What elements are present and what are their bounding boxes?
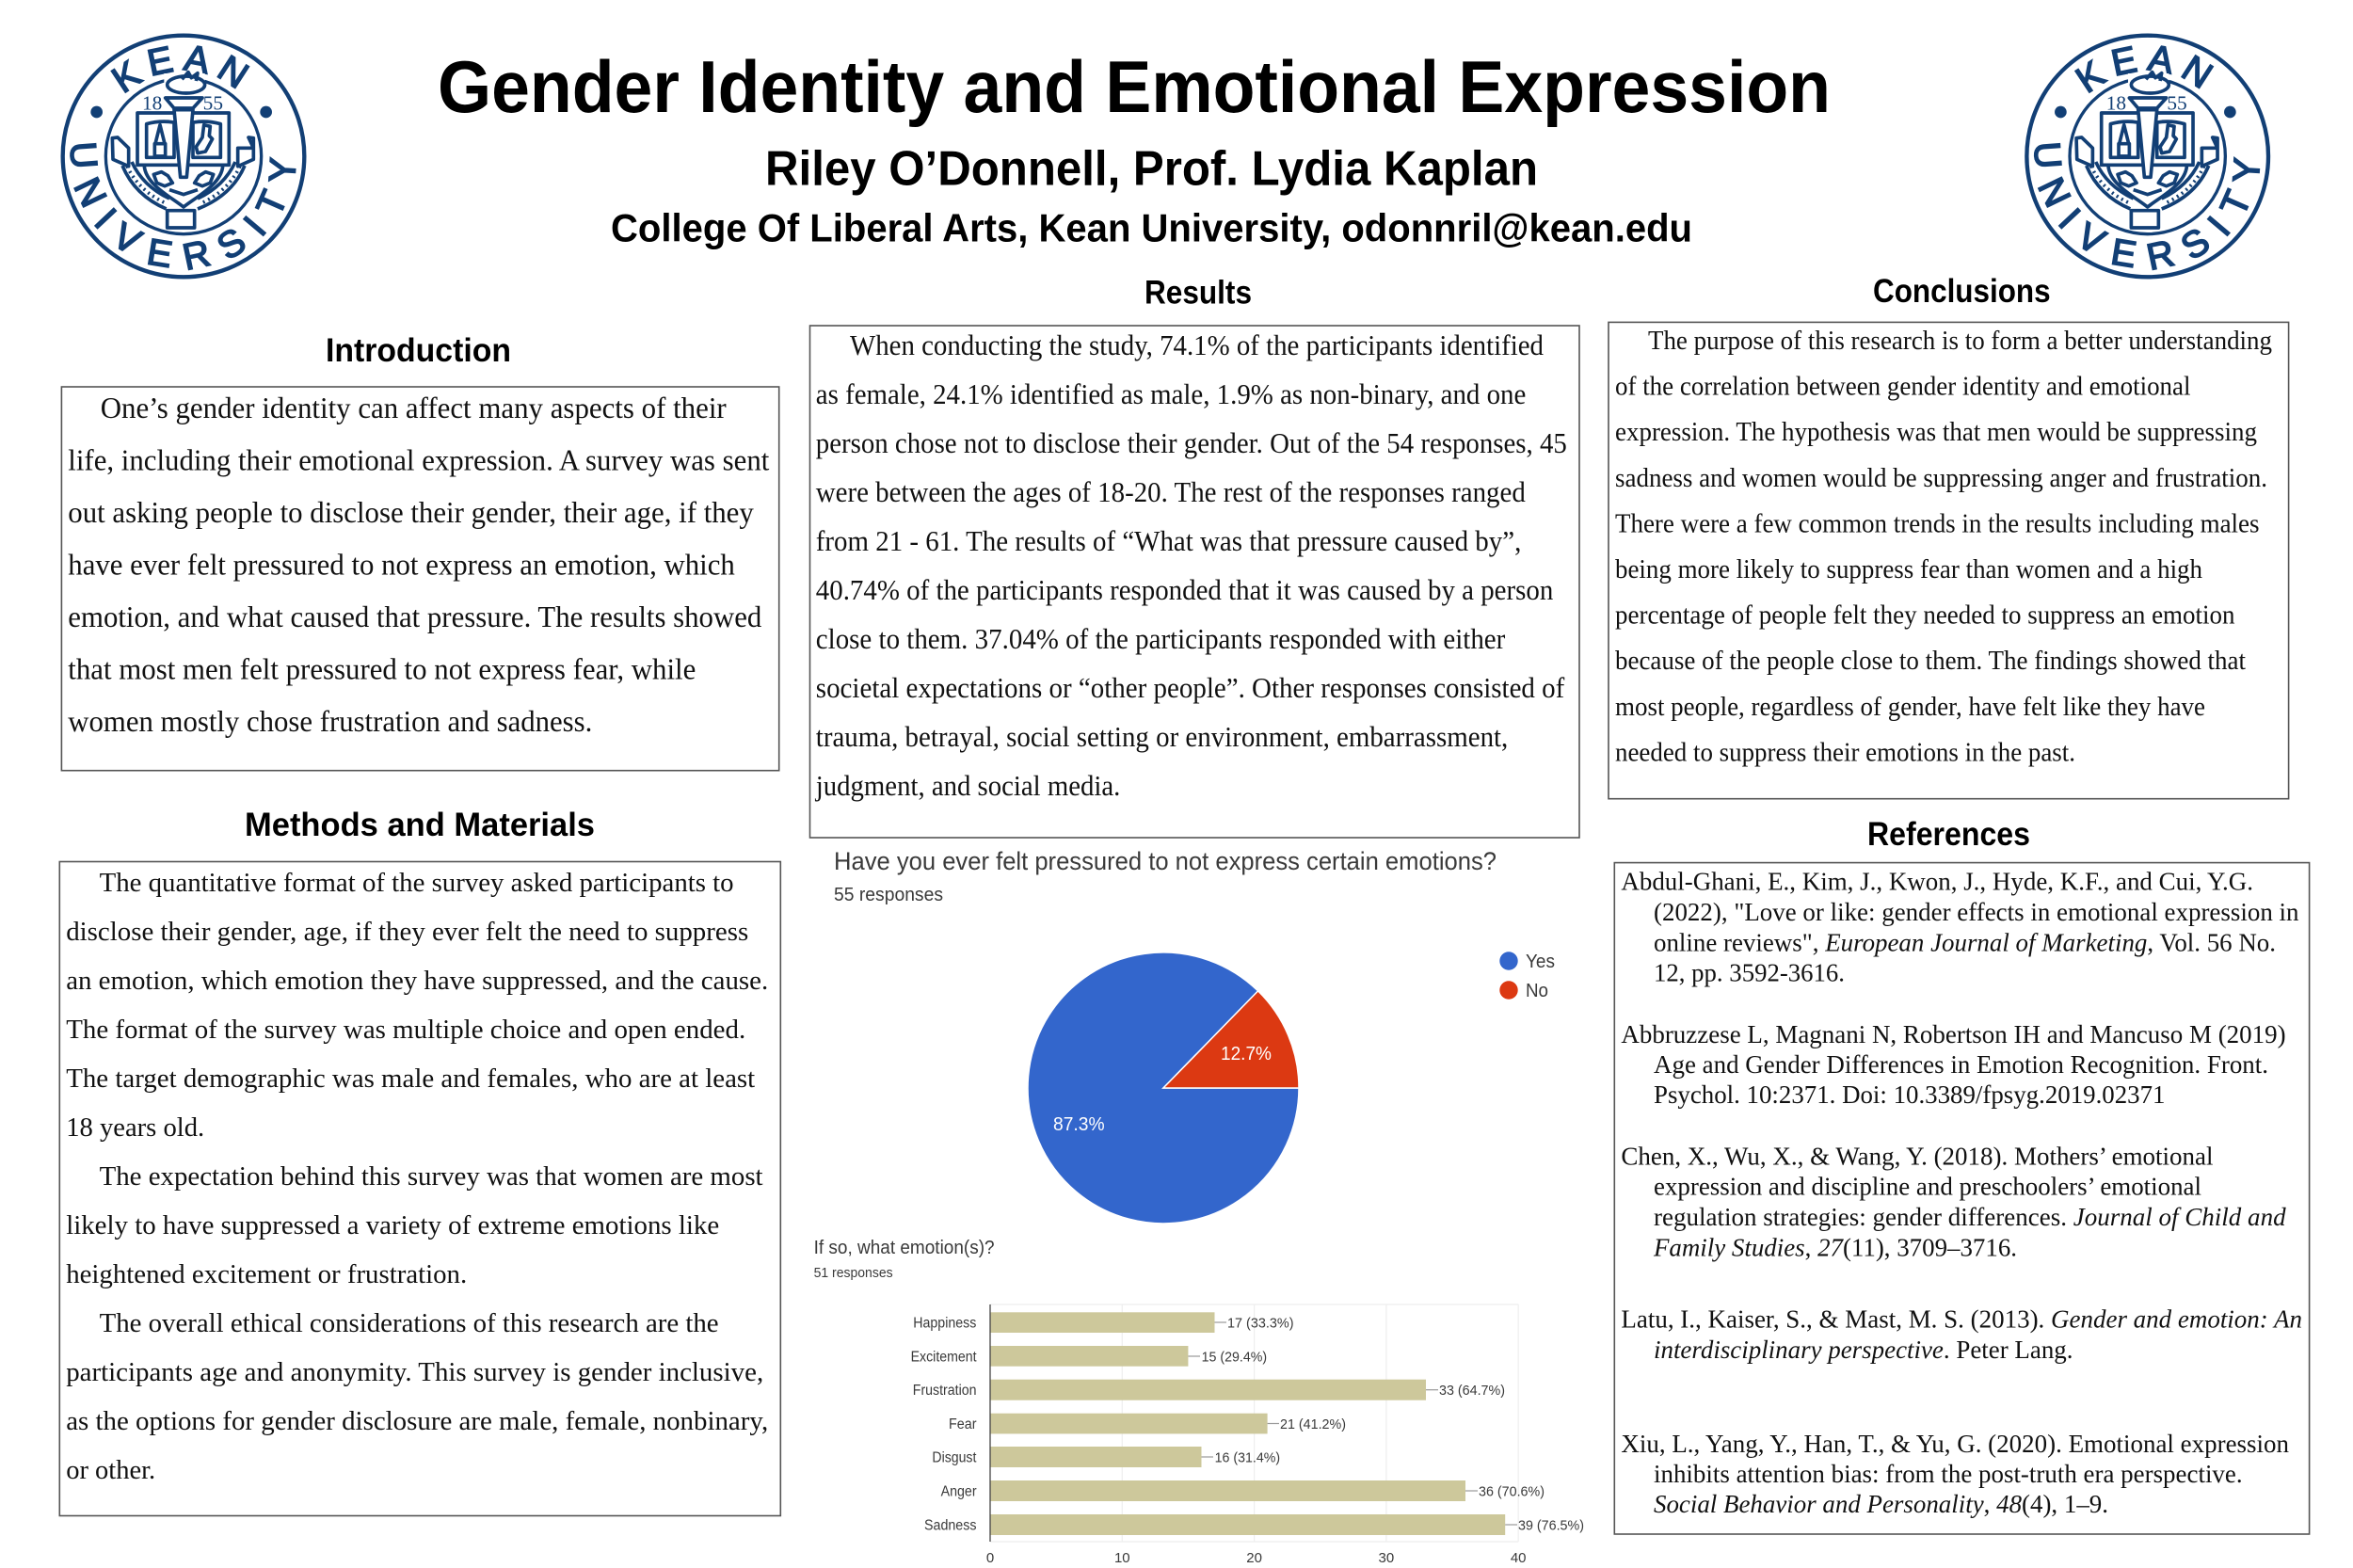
bar chart response count: 51 responses	[814, 1265, 893, 1281]
methods text: or other.	[66, 1455, 155, 1485]
introduction text: have ever felt pressured to not express an emotion, which	[68, 548, 735, 582]
legend: Yes	[1526, 952, 1555, 972]
results text: judgment, and social media.	[815, 770, 1120, 802]
icon: Kean University seal, left: KEAN	[110, 45, 250, 94]
references text: expression and discipline and preschoolers’ emotional	[1654, 1173, 2201, 1201]
value labels: 17 (33.3%)	[1227, 1316, 1294, 1331]
bars	[990, 1312, 1505, 1535]
panel: methods and materials	[59, 807, 780, 1515]
references text: Abbruzzese L, Magnani N, Robertson IH and Mancuso M (2019)	[1621, 1020, 2286, 1048]
methods text: 18 years old.	[66, 1112, 204, 1143]
references text: interdisciplinary perspective. Peter Lang.	[1654, 1336, 2073, 1364]
icon: Kean University seal, right	[2025, 34, 2270, 279]
panel: introduction	[61, 332, 779, 771]
icon: Kean University seal, left: 18	[142, 92, 162, 115]
methods text: The expectation behind this survey was that women are most	[100, 1161, 763, 1192]
methods text: as the options for gender disclosure are male, female, nonbinary,	[66, 1406, 768, 1436]
affiliation: College Of Liberal Arts, Kean University, odonnril@kean.edu	[611, 205, 1692, 250]
heading: introduction: Introduction	[326, 332, 511, 369]
references text: Age and Gender Differences in Emotion Recognition. Front.	[1654, 1050, 2268, 1079]
axis tick labels: 10	[1114, 1550, 1130, 1566]
references text: inhibits attention bias: from the post-truth era perspective.	[1654, 1460, 2243, 1488]
conclusions text: of the correlation between gender identity and emotional	[1615, 373, 2191, 402]
references text: (2022), "Love or like: gender effects in emotional expression in	[1654, 898, 2299, 926]
conclusions text: needed to suppress their emotions in the past.	[1615, 738, 2075, 767]
panel: references	[1614, 816, 2310, 1534]
panel: conclusions	[1609, 273, 2289, 799]
methods text: The target demographic was male and females, who are at least	[66, 1064, 755, 1094]
results text: close to them. 37.04% of the participants responded with either	[816, 623, 1505, 655]
value labels: 36 (70.6%)	[1479, 1483, 1545, 1500]
methods text: The format of the survey was multiple choice and open ended.	[66, 1015, 745, 1045]
conclusions text: because of the people close to them. The findings showed that	[1615, 647, 2246, 676]
references text: online reviews", European Journal of Marketing, Vol. 56 No.	[1654, 928, 2276, 956]
references text: Chen, X., Wu, X., & Wang, Y. (2018). Mothers’ emotional	[1621, 1143, 2214, 1171]
results text: When conducting the study, 74.1% of the participants identified	[850, 329, 1544, 361]
conclusions text: expression. The hypothesis was that men would be suppressing	[1615, 418, 2257, 447]
label: 87.3%: 87.3%	[1053, 1114, 1105, 1135]
icon: Kean University seal, right: 18	[2106, 92, 2126, 115]
results text: societal expectations or “other people”. Other responses consisted of	[816, 672, 1565, 704]
conclusions box	[1609, 322, 2289, 799]
introduction text: women mostly chose frustration and sadness.	[68, 704, 592, 738]
heading: results: Results	[1144, 275, 1252, 311]
category labels: Disgust	[932, 1449, 977, 1466]
results text	[815, 329, 1567, 802]
panel: bar chart	[814, 1238, 1584, 1566]
icon: Kean University seal, left: 55	[203, 92, 223, 115]
conclusions text	[1615, 327, 2272, 767]
axis tick labels: 40	[1511, 1550, 1527, 1566]
methods text: an emotion, which emotion they have suppressed, and the cause.	[66, 966, 768, 996]
conclusions text: most people, regardless of gender, have felt like they have	[1615, 693, 2205, 722]
heading: conclusions: Conclusions	[1873, 273, 2051, 310]
category labels: Anger	[941, 1483, 977, 1500]
introduction text	[68, 391, 769, 738]
references text: Psychol. 10:2371. Doi: 10.3389/fpsyg.2019.02371	[1654, 1080, 2165, 1109]
title: Gender Identity and Emotional Expression	[438, 45, 1831, 128]
pie chart response count: 55 responses	[834, 885, 943, 905]
references text	[1621, 868, 2302, 1518]
methods box	[59, 862, 780, 1515]
bar chart title: If so, what emotion(s)?	[814, 1238, 995, 1258]
pie slice: yes	[1028, 952, 1299, 1224]
results text: trauma, betrayal, social setting or environment, embarrassment,	[816, 721, 1508, 753]
references text: Latu, I., Kaiser, S., & Mast, M. S. (2013). Gender and emotion: An	[1621, 1304, 2302, 1333]
introduction text: emotion, and what caused that pressure. The results showed	[68, 600, 761, 633]
axis tick labels: 30	[1379, 1550, 1394, 1566]
category labels: Happiness	[913, 1316, 977, 1331]
methods text: disclose their gender, age, if they ever felt the need to suppress	[66, 917, 748, 947]
category labels	[911, 1316, 977, 1534]
methods text: The quantitative format of the survey asked participants to	[100, 868, 734, 898]
label: 12.7%: 12.7%	[1221, 1044, 1272, 1064]
heading: methods and materials: Methods and Materials	[245, 807, 595, 843]
results text: were between the ages of 18-20. The rest of the responses ranged	[816, 476, 1526, 508]
legend: No	[1526, 981, 1548, 1001]
pie slice: no	[1163, 991, 1299, 1088]
methods text: participants age and anonymity. This survey is gender inclusive,	[66, 1357, 763, 1387]
references text: Social Behavior and Personality, 48(4), 1–9.	[1654, 1490, 2108, 1518]
value labels: 15 (29.4%)	[1202, 1350, 1267, 1365]
references text: 12, pp. 3592-3616.	[1654, 959, 1845, 987]
value labels: 39 (76.5%)	[1518, 1517, 1584, 1534]
axis tick labels: 0	[986, 1550, 994, 1566]
value labels: 33 (64.7%)	[1439, 1383, 1505, 1399]
results box	[809, 326, 1579, 838]
bar leader lines	[1188, 1322, 1517, 1525]
axis tick labels: 20	[1246, 1550, 1262, 1566]
icon: Kean University seal, left: UNIVERSITY	[70, 143, 296, 271]
conclusions text: being more likely to suppress fear than women and a high	[1615, 555, 2202, 584]
references text: Abdul-Ghani, E., Kim, J., Kwon, J., Hyde, K.F., and Cui, Y.G.	[1621, 868, 2253, 896]
value labels	[1202, 1316, 1584, 1534]
results text: from 21 - 61. The results of “What was that pressure caused by”,	[816, 525, 1521, 557]
heading: references: References	[1867, 816, 2030, 853]
introduction text: out asking people to disclose their gender, their age, if they	[68, 495, 754, 529]
introduction box	[61, 387, 779, 771]
results text: person chose not to disclose their gender. Out of the 54 responses, 45	[816, 427, 1567, 459]
axis tick labels	[986, 1550, 1527, 1566]
pie chart title: Have you ever felt pressured to not express certain emotions?	[834, 847, 1497, 875]
references text: Xiu, L., Yang, Y., Han, T., & Yu, G. (2020). Emotional expression	[1621, 1430, 2289, 1458]
icon: Kean University seal, right: UNIVERSITY	[2033, 143, 2261, 271]
panel: results	[809, 275, 1579, 838]
value labels: 21 (41.2%)	[1280, 1416, 1346, 1432]
references text: regulation strategies: gender differences. Journal of Child and	[1654, 1203, 2286, 1231]
conclusions text: percentage of people felt they needed to suppress an emotion	[1615, 601, 2234, 631]
value labels: 16 (31.4%)	[1215, 1449, 1280, 1466]
authors: Riley O’Donnell, Prof. Lydia Kaplan	[765, 141, 1538, 196]
results text: as female, 24.1% identified as male, 1.9% as non-binary, and one	[816, 378, 1526, 410]
methods text: The overall ethical considerations of this research are the	[100, 1308, 719, 1338]
references box	[1614, 863, 2310, 1534]
methods text: heightened excitement or frustration.	[66, 1259, 467, 1289]
methods text: likely to have suppressed a variety of extreme emotions like	[66, 1210, 719, 1240]
results text: 40.74% of the participants responded that it was caused by a person	[816, 574, 1553, 606]
icon: Kean University seal, right: 55	[2167, 92, 2187, 115]
category labels: Sadness	[924, 1517, 977, 1534]
icon: Kean University seal, right: KEAN	[2074, 45, 2214, 94]
conclusions text: The purpose of this research is to form a better understanding	[1648, 327, 2272, 356]
legend	[1499, 952, 1555, 1001]
category labels: Excitement	[911, 1350, 977, 1365]
category labels: Frustration	[913, 1383, 977, 1399]
introduction text: life, including their emotional expression. A survey was sent	[68, 442, 769, 476]
conclusions text: There were a few common trends in the results including males	[1615, 509, 2259, 538]
references text: Family Studies, 27(11), 3709–3716.	[1653, 1233, 2017, 1261]
category labels: Fear	[949, 1416, 977, 1432]
methods text	[66, 868, 768, 1485]
introduction text: One’s gender identity can affect many aspects of their	[101, 391, 727, 424]
icon: Kean University seal, left	[60, 34, 307, 279]
conclusions text: sadness and women would be suppressing anger and frustration.	[1615, 464, 2267, 493]
introduction text: that most men felt pressured to not express fear, while	[68, 651, 696, 685]
panel: pie chart	[834, 847, 1555, 1224]
